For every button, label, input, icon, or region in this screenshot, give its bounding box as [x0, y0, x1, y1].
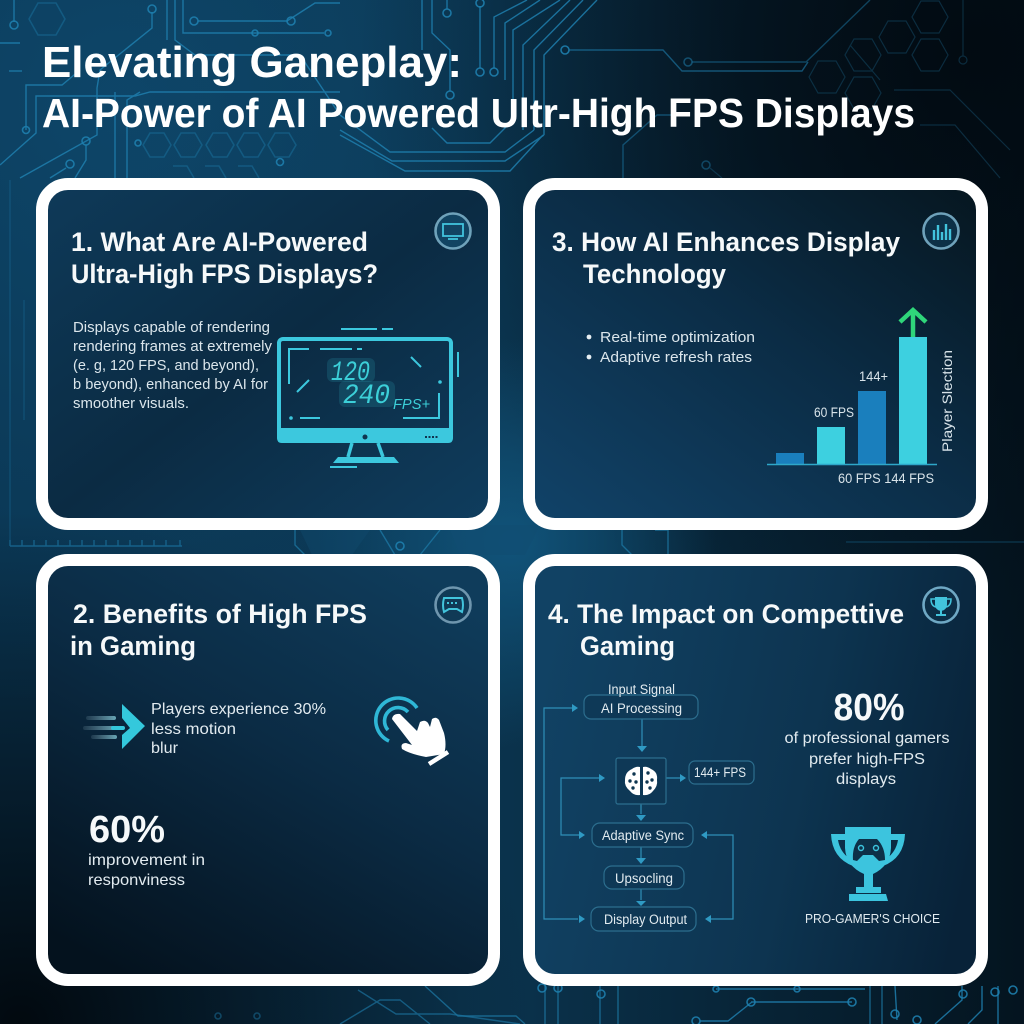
bullet list: [587, 329, 755, 366]
icon: tapping hand: [376, 698, 448, 764]
flowchart: AI pipeline: AI Processing: [601, 701, 682, 716]
body text: definition: b beyond), enhanced by AI for: [73, 376, 268, 393]
title: [42, 38, 915, 136]
body text: definition: rendering frames at extremely: [73, 338, 272, 355]
heading: panel 1: Ultra-High FPS Displays?: [71, 259, 378, 289]
illustration: monitor with FPS readout: FPS+: [393, 396, 430, 413]
icon: brain: [625, 767, 657, 795]
flowchart: AI pipeline: Upsocling: [615, 871, 673, 886]
text: motion blur: less motion: [151, 721, 236, 738]
icon: monitor badge: [436, 214, 470, 248]
body text: definition: (e. g, 120 FPS, and beyond),: [73, 357, 259, 374]
stat: 80% of pros: 80%: [834, 687, 904, 729]
icon: trophy with gamepad: [831, 827, 905, 901]
icon: motion arrow: [83, 704, 145, 749]
text: motion blur: [151, 701, 326, 757]
body text: definition: [73, 319, 272, 412]
heading: panel 1: [71, 227, 378, 289]
bar chart: FPS: Player Slection: [939, 350, 955, 452]
stat: 80% of pros: [784, 687, 950, 788]
stat: 60% responsiveness: responviness: [88, 872, 185, 889]
icon: trophy badge: [924, 588, 958, 622]
text: motion blur: blur: [151, 740, 179, 757]
stat: 60% responsiveness: improvement in: [88, 852, 205, 869]
illustration: monitor with FPS readout: 120: [331, 358, 370, 389]
heading: panel 4: 4. The Impact on Compettive: [548, 599, 904, 629]
bar chart: FPS: 60 FPS: [814, 405, 854, 420]
bullet list: Adaptive refresh rates: [600, 349, 752, 366]
flowchart: AI pipeline: Adaptive Sync: [602, 828, 684, 843]
heading: panel 2: in Gaming: [70, 631, 196, 661]
heading: panel 3: Technology: [583, 259, 726, 289]
flowchart: AI pipeline: 144+ FPS: [694, 765, 746, 780]
heading: panel 4: Gaming: [580, 631, 675, 661]
panel: what are AI-powered displays: [42, 184, 494, 524]
stat: 80% of pros: displays: [836, 771, 896, 788]
body text: definition: Displays capable of rendering: [73, 319, 270, 336]
title: AI-Power of AI Powered Ultr-High FPS Displays: [42, 90, 915, 136]
stat: 60% responsiveness: 60%: [89, 809, 165, 851]
heading: panel 4: [548, 599, 904, 661]
panel: benefits of high FPS: [42, 560, 494, 980]
panel: impact on competitive gaming: [529, 560, 982, 980]
bullet list: Real-time optimization: [600, 329, 755, 346]
stat: 60% responsiveness: [88, 809, 205, 889]
flowchart: AI pipeline: [544, 682, 754, 931]
icon: chart badge: [924, 214, 958, 248]
bar chart: FPS: 144+: [859, 369, 888, 384]
stat: 80% of pros: of professional gamers: [784, 730, 950, 747]
bar chart: FPS: 60 FPS 144 FPS: [838, 471, 934, 486]
heading: panel 2: [70, 599, 367, 661]
heading: panel 3: 3. How AI Enhances Display: [552, 227, 900, 257]
icon: gamepad badge: [436, 588, 470, 622]
flowchart: AI pipeline: Display Output: [604, 912, 687, 927]
body text: definition: smoother visuals.: [73, 395, 189, 412]
bar chart: FPS: [767, 310, 955, 486]
flowchart: AI pipeline: Input Signal: [608, 682, 675, 697]
illustration: monitor with FPS readout: [277, 329, 458, 467]
caption: pro-gamer's choice: PRO-GAMER'S CHOICE: [805, 911, 940, 926]
heading: panel 3: [552, 227, 900, 289]
text: motion blur: Players experience 30%: [151, 701, 326, 718]
heading: panel 1: 1. What Are AI-Powered: [71, 227, 368, 257]
title: Elevating Ganeplay:: [42, 38, 462, 87]
stat: 80% of pros: prefer high-FPS: [809, 751, 925, 768]
heading: panel 2: 2. Benefits of High FPS: [73, 599, 367, 629]
panel: how AI enhances display technology: [529, 184, 982, 524]
illustration: monitor with FPS readout: 240: [343, 381, 390, 412]
arrow: upward growth: [900, 310, 926, 337]
